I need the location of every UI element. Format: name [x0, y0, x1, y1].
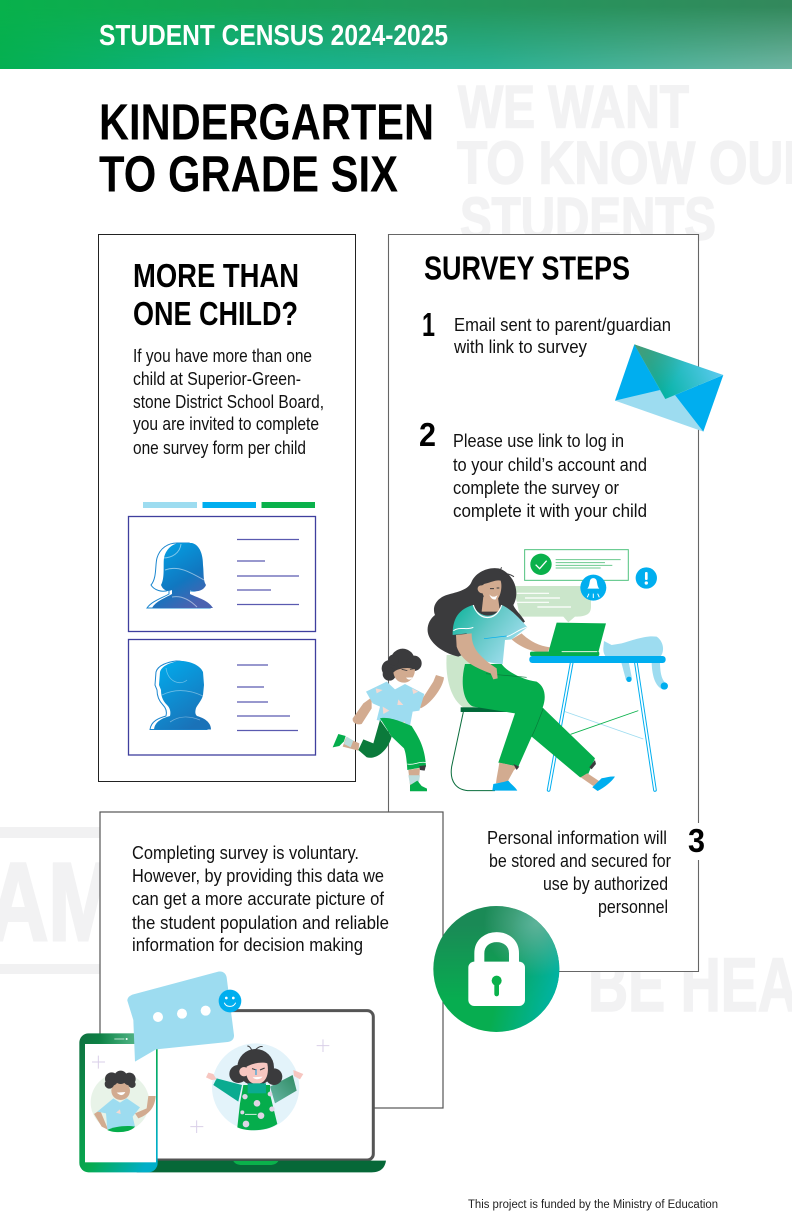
ghost slogan: we want to know our students: STUDENTS — [460, 186, 716, 252]
ghost slogan: we want to know our students — [457, 74, 792, 252]
cat — [603, 636, 668, 690]
text lines — [237, 665, 298, 730]
illustration: video call on devices — [79, 971, 386, 1172]
paragraph: voluntary: Completing survey is voluntary. — [132, 843, 359, 863]
step 1 text: with link to survey — [453, 337, 587, 357]
heading: more than one child — [133, 257, 299, 332]
main title: TO GRADE SIX — [99, 146, 398, 202]
step 2 text — [453, 431, 647, 521]
paragraph: voluntary: information for decision making — [132, 935, 363, 955]
text lines — [237, 540, 299, 604]
header banner — [0, 0, 792, 69]
banner title: STUDENT CENSUS 2024-2025 — [99, 20, 448, 52]
panel: voluntary survey — [100, 812, 443, 1108]
icon: padlock — [433, 906, 559, 1032]
profile card: girl — [128, 516, 316, 632]
paragraph: voluntary: However, by providing this data we — [132, 866, 384, 886]
step 2 text: complete the survey or — [453, 478, 619, 498]
boy avatar — [91, 1071, 156, 1132]
child running — [333, 649, 444, 791]
heading: more than one child: ONE CHILD? — [133, 295, 298, 332]
laptop — [530, 623, 606, 656]
woman — [428, 567, 615, 791]
heading: survey steps: SURVEY STEPS — [424, 250, 630, 286]
illustration: mother and child at desk — [333, 550, 668, 791]
icon: girl silhouette — [147, 543, 213, 608]
paragraph: one survey per child: one survey form per child — [133, 438, 306, 458]
ghost slogan: we want to know our students: WE WANT — [458, 74, 689, 140]
paragraph: one survey per child: If you have more than one — [133, 346, 312, 366]
paragraph: one survey per child: child at Superior-Green- — [133, 369, 301, 389]
desk legs — [549, 663, 655, 790]
step 2 text: to your child’s account and — [453, 455, 647, 475]
icon: boy silhouette — [150, 661, 211, 730]
paragraph: voluntary — [132, 843, 389, 955]
icon: alert — [636, 567, 657, 589]
main title — [99, 94, 434, 202]
icon: smiley — [219, 990, 241, 1012]
paragraph: one survey per child — [133, 346, 324, 458]
step 2 number: 2 — [419, 416, 436, 453]
step 1 text — [453, 315, 671, 357]
paragraph: one survey per child: stone District School Board, — [133, 392, 324, 412]
paragraph: one survey per child: you are invited to complete — [133, 414, 319, 434]
icon: bell — [580, 575, 606, 601]
step 1 number: 1 — [422, 306, 435, 343]
main title: KINDERGARTEN — [99, 94, 434, 150]
laptop — [137, 1011, 386, 1172]
chair — [446, 655, 515, 791]
speech bubble — [513, 586, 591, 622]
step 3 text: be stored and secured for — [489, 851, 671, 871]
ghost slogan: am — [0, 827, 118, 974]
phone — [79, 1033, 158, 1172]
heading: more than one child: MORE THAN — [133, 257, 299, 294]
step 3 text: Personal information will — [487, 828, 667, 848]
girl avatar — [206, 1043, 303, 1131]
paragraph: voluntary: can get a more accurate picture of — [132, 889, 385, 909]
step 1 text: Email sent to parent/guardian — [454, 315, 671, 335]
icon: envelope — [615, 344, 723, 432]
chat bubble — [127, 971, 234, 1062]
funding credit: This project is funded by the Ministry of Education — [468, 1199, 718, 1211]
step 2 text: Please use link to log in — [453, 431, 624, 451]
paragraph: voluntary: the student population and reliable — [132, 913, 389, 933]
step 3 number: 3 — [688, 822, 705, 859]
panel: survey steps — [388, 234, 723, 972]
colour bars — [143, 502, 315, 508]
desk top — [529, 656, 666, 663]
panel: more than one child — [98, 234, 356, 782]
step 3 text: personnel — [598, 897, 668, 917]
step 2 text: complete it with your child — [453, 501, 647, 521]
step 3 text — [487, 828, 671, 917]
step 3 text: use by authorized — [543, 874, 668, 894]
profile card: boy — [128, 640, 316, 755]
notification card — [525, 550, 628, 580]
